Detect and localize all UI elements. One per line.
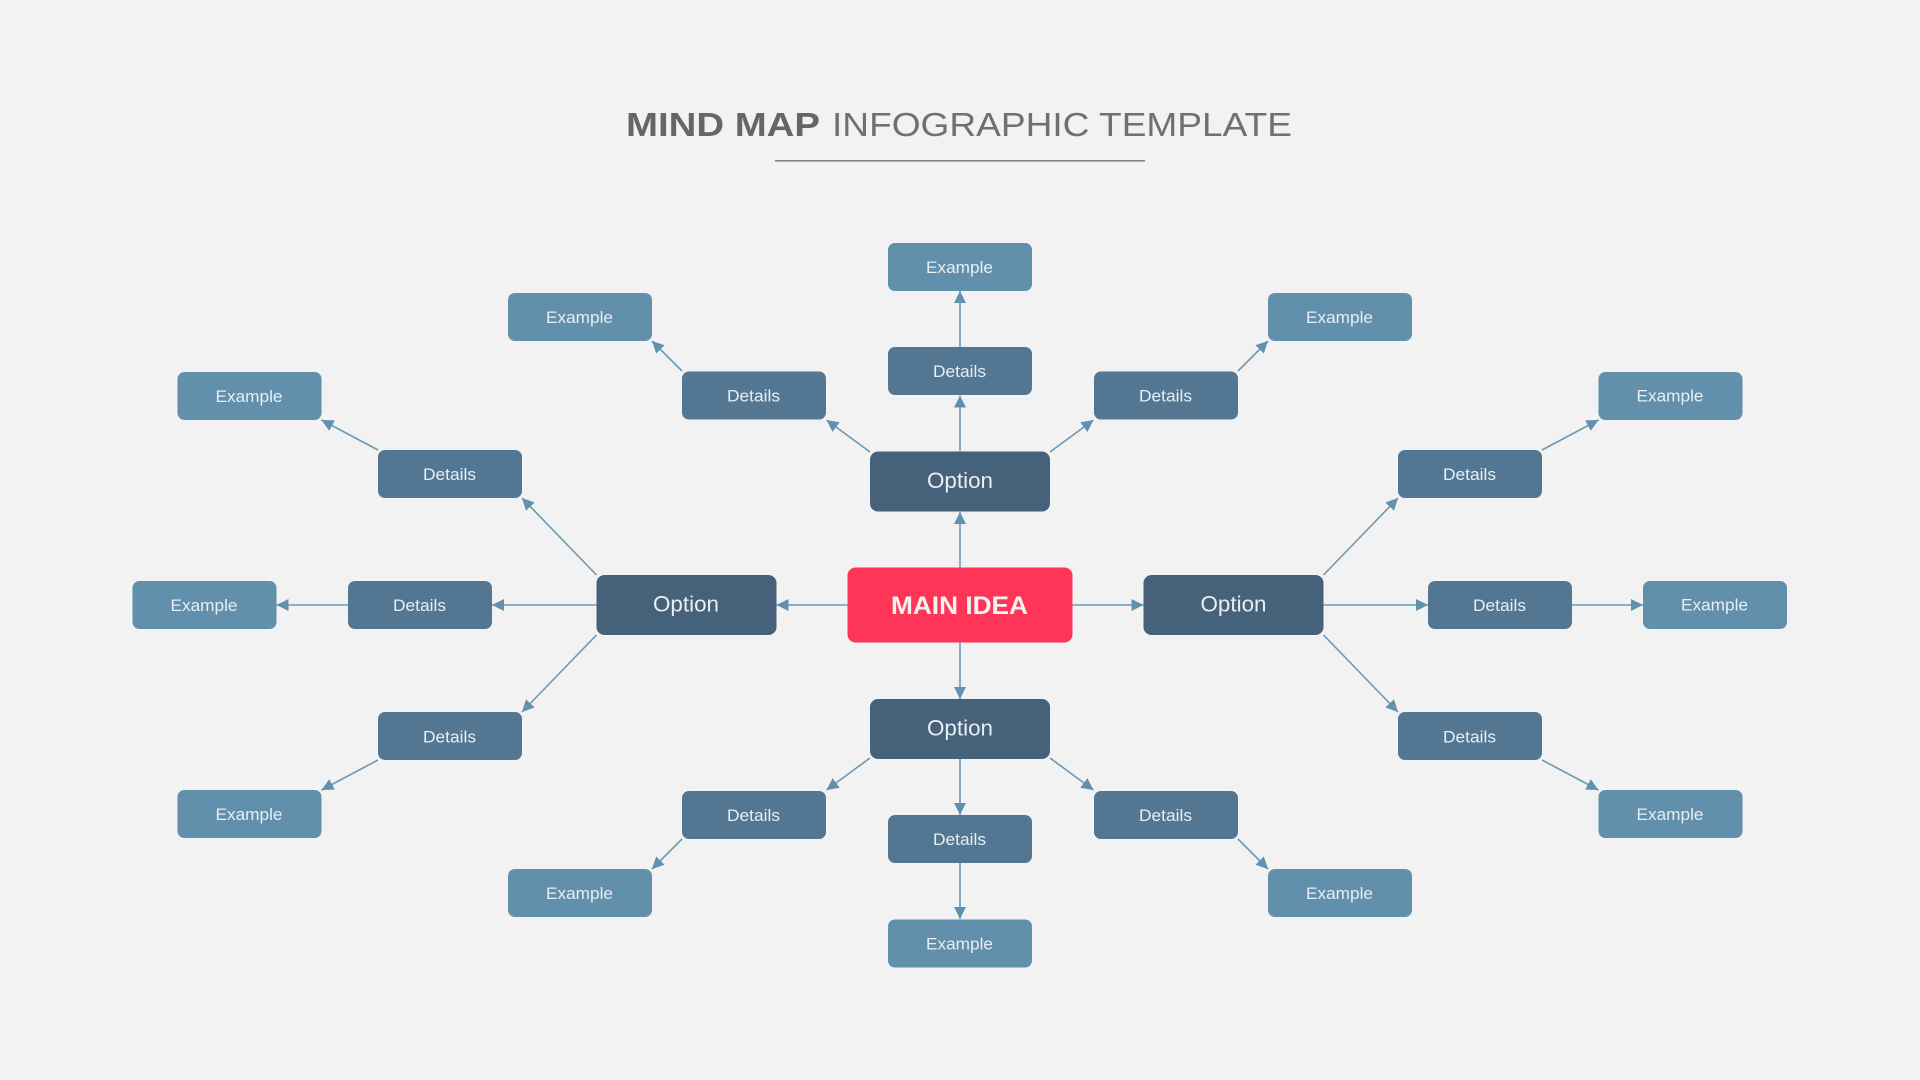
example: right middle <box>1643 581 1787 629</box>
title <box>626 106 1292 143</box>
arrow: main to right option <box>1072 604 1144 606</box>
details: left middle: Details <box>393 596 446 615</box>
option: bottom <box>870 699 1050 759</box>
arrow: main to bottom option <box>959 642 961 699</box>
arrows: left branch <box>276 420 596 790</box>
option: top <box>870 452 1050 512</box>
example: left upper <box>178 372 322 420</box>
example: top right <box>1268 293 1412 341</box>
example: bottom right: Example <box>1306 884 1373 903</box>
details: top right <box>1094 372 1238 420</box>
main idea box <box>848 568 1072 642</box>
example: right lower <box>1598 790 1742 838</box>
main idea box: MAIN IDEA <box>891 592 1028 620</box>
example: top right: Example <box>1306 308 1373 327</box>
details: top centre <box>888 347 1032 395</box>
details: right lower: Details <box>1443 728 1496 746</box>
details: left lower <box>378 712 522 760</box>
details: right middle <box>1428 581 1572 629</box>
details: left upper <box>378 450 522 498</box>
arrow: main to left option <box>776 604 848 606</box>
details: left lower: Details <box>423 728 476 746</box>
example: bottom left <box>508 869 652 917</box>
option: right <box>1144 575 1324 635</box>
details: right upper: Details <box>1443 465 1496 484</box>
example: top centre: Example <box>926 258 993 277</box>
option: top: Option <box>927 468 993 493</box>
example: bottom left: Example <box>546 884 613 903</box>
details: top left: Details <box>727 386 780 406</box>
example: bottom centre <box>888 920 1032 968</box>
title: MIND MAP <box>626 106 820 143</box>
title: INFOGRAPHIC TEMPLATE <box>832 106 1292 143</box>
details: right middle: Details <box>1473 596 1526 615</box>
example: top left <box>508 293 652 341</box>
details: top right: Details <box>1139 386 1192 406</box>
option: right: Option <box>1200 592 1266 616</box>
example: top centre <box>888 243 1032 291</box>
details: bottom centre <box>888 815 1032 863</box>
example: top left: Example <box>546 308 613 327</box>
example: right lower: Example <box>1636 805 1704 824</box>
example: left lower: Example <box>216 805 282 824</box>
example: left upper: Example <box>216 387 282 406</box>
details: top centre: Details <box>933 362 986 381</box>
details: top left <box>682 372 826 420</box>
details: bottom right: Details <box>1139 806 1192 825</box>
example: left middle <box>132 581 276 629</box>
arrows: bottom branch <box>652 758 1268 919</box>
option: left <box>596 575 776 635</box>
example: bottom centre: Example <box>926 934 993 954</box>
details: left middle <box>348 581 492 629</box>
arrows: top branch <box>652 291 1268 452</box>
details: bottom left: Details <box>727 806 780 825</box>
details: bottom right <box>1094 791 1238 839</box>
arrow: main to top option <box>959 512 961 568</box>
example: right upper <box>1598 372 1742 420</box>
example: right middle: Example <box>1681 596 1748 614</box>
option: bottom: Option <box>927 716 993 740</box>
example: left middle: Example <box>170 596 238 615</box>
details: right lower <box>1398 712 1542 760</box>
details: bottom centre: Details <box>933 830 986 849</box>
details: left upper: Details <box>423 465 476 484</box>
details: bottom left <box>682 791 826 839</box>
example: bottom right <box>1268 869 1412 917</box>
arrows: right branch <box>1324 420 1643 790</box>
option: left: Option <box>653 592 719 616</box>
details: right upper <box>1398 450 1542 498</box>
example: right upper: Example <box>1636 386 1704 406</box>
example: left lower <box>178 790 322 838</box>
